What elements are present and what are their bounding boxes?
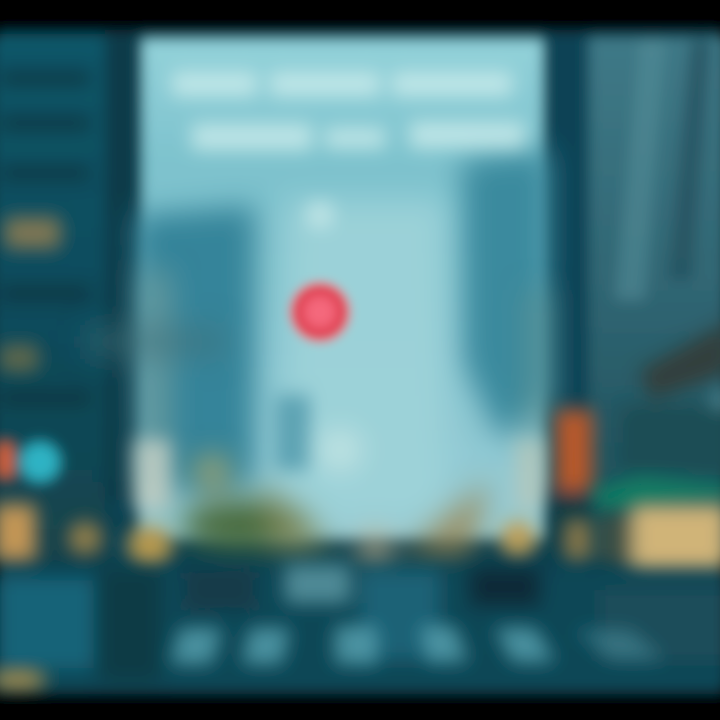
trees and street glow xyxy=(180,455,490,564)
bottom black band xyxy=(0,694,720,720)
left building windows xyxy=(0,70,90,406)
top black band xyxy=(0,0,720,30)
central pale tower xyxy=(285,200,445,520)
title placeholder bars xyxy=(172,72,525,150)
left coloured signs xyxy=(0,441,61,483)
left shop lights xyxy=(0,505,590,565)
lit shop window xyxy=(600,505,720,570)
small distant tower xyxy=(275,395,310,470)
right overhang xyxy=(620,320,720,475)
crosswalk stripes xyxy=(170,626,665,664)
left signs xyxy=(0,218,60,371)
distant building left xyxy=(135,205,255,500)
road xyxy=(0,572,720,694)
pale pole bases xyxy=(135,440,545,510)
sky panel xyxy=(140,38,545,538)
right column xyxy=(548,30,590,430)
traffic light xyxy=(550,410,592,550)
vehicles xyxy=(100,565,540,680)
right building xyxy=(588,36,720,556)
lamp posts and street poles xyxy=(85,270,550,500)
distant building right xyxy=(462,150,550,440)
left building xyxy=(0,30,137,564)
bottom-left glow xyxy=(0,669,46,691)
red marker xyxy=(290,282,350,342)
green awning xyxy=(590,475,720,512)
faint shape above marker xyxy=(306,201,334,229)
